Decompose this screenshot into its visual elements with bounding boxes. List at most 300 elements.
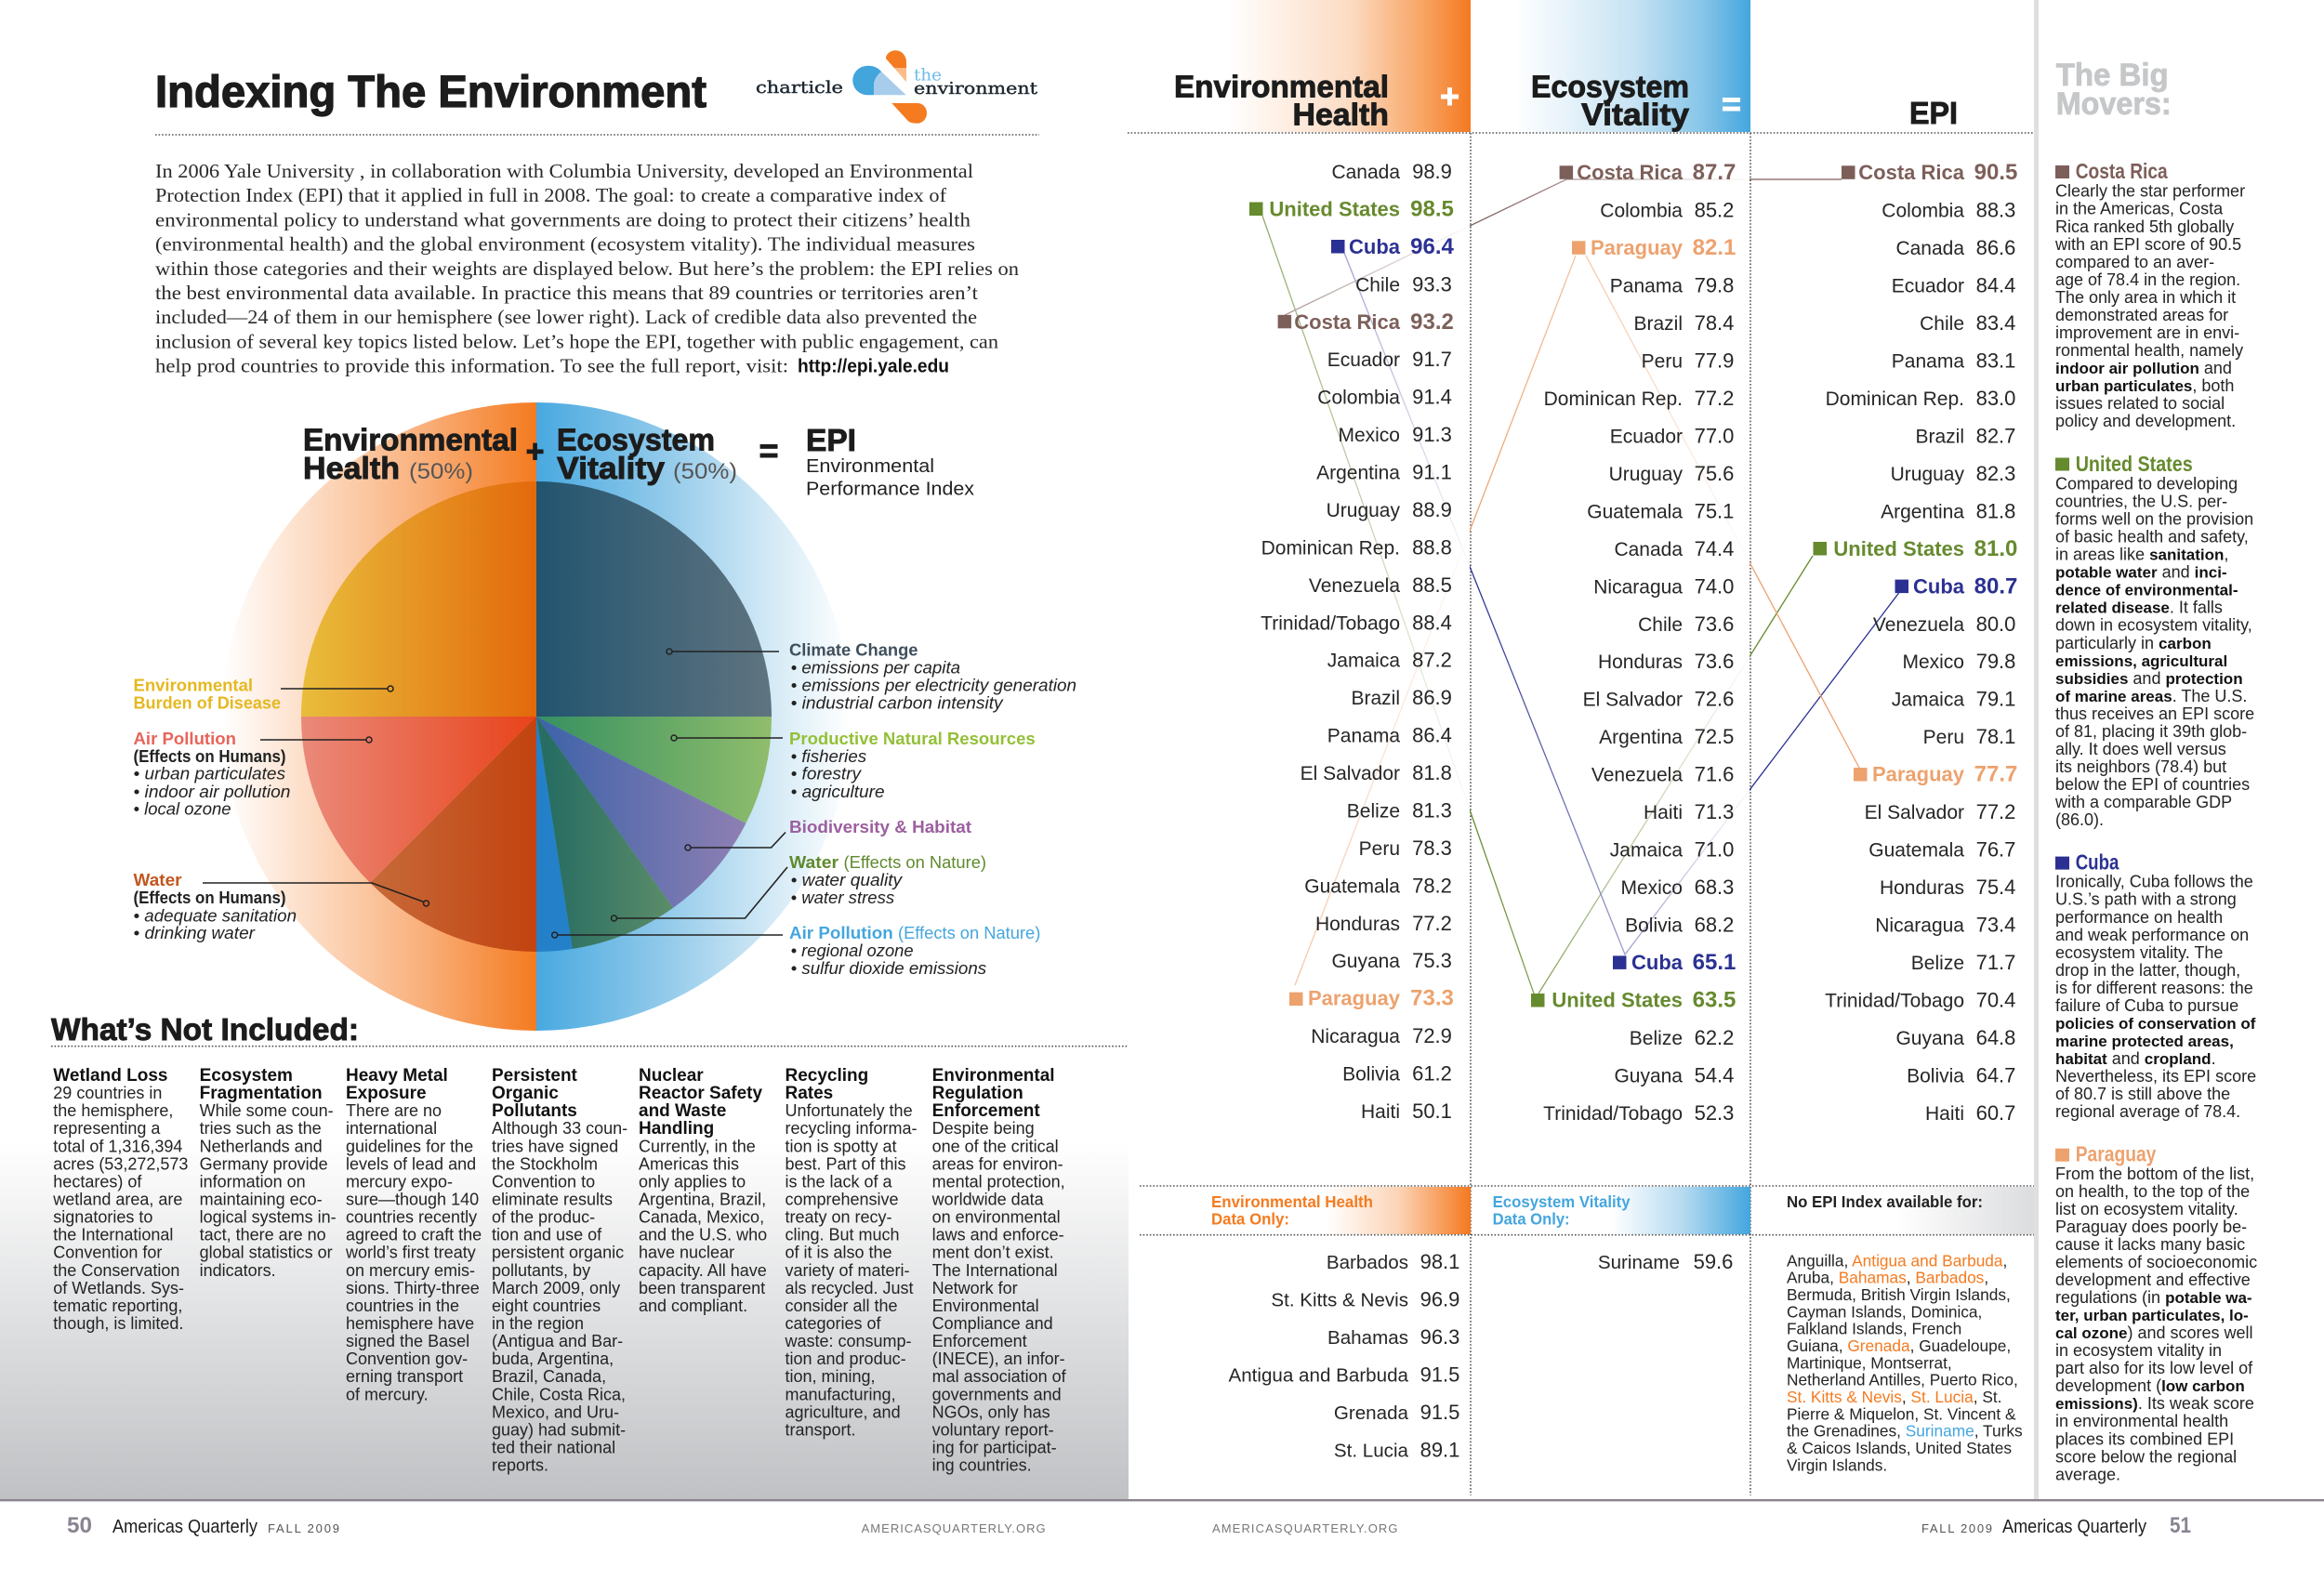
body: policies of conservation of <box>2055 1015 2256 1033</box>
column heading: ecosystem vitality <box>1531 69 1690 132</box>
not included: heavy metal exposure: of mercury. <box>346 1385 429 1403</box>
ranking column: ecosystem vitality names: El Salvador <box>1583 690 1683 711</box>
label: air pollution effects on nature <box>789 924 1040 978</box>
pie heading: EPI: Performance Index <box>806 480 974 500</box>
ranking column: EPI scores: 80.7 <box>1974 573 2017 599</box>
ranking column: environmental health scores: 93.3 <box>1412 272 1452 296</box>
heading: Costa Rica <box>2076 159 2168 183</box>
connector: Costa Rica <box>1285 179 1842 315</box>
not included: heavy metal exposure: sure—though 140 <box>346 1190 479 1208</box>
no EPI country list: Aruba, Bahamas, Barbados, <box>1787 1269 1988 1287</box>
environmental health only list: 91.5 <box>1420 1363 1459 1387</box>
not included: recycling rates: tion is spotty at <box>785 1137 897 1155</box>
ranking column: environmental health names: Ecuador <box>1327 349 1400 371</box>
ranking column: ecosystem vitality scores: 87.7 <box>1693 160 1736 185</box>
website: AMERICASQUARTERLY.ORG <box>862 1521 1046 1535</box>
environmental health only list <box>1228 1250 1459 1462</box>
body: in the Americas, Costa <box>2055 200 2224 218</box>
footer rule <box>0 1499 2324 1501</box>
not included: recycling rates: manufacturing, <box>785 1385 896 1403</box>
body: in environmental health <box>2055 1412 2228 1430</box>
column heading: environmental health: Health <box>1292 98 1389 132</box>
not included: heavy metal exposure: Convention gov- <box>346 1349 468 1368</box>
ranking column: EPI scores: 80.0 <box>1976 612 2015 636</box>
label: air pollution effects on nature: Air Pollution <box>789 924 893 942</box>
environmental health only list: Bahamas <box>1327 1327 1408 1349</box>
ranking column: environmental health names: Dominican Rep. <box>1261 537 1400 559</box>
not included: ecosystem fragmentation: Ecosystem <box>200 1066 293 1086</box>
body: Compared to developing <box>2055 474 2238 493</box>
ranking column: EPI scores: 82.7 <box>1976 424 2015 447</box>
column heading: EPI: EPI <box>1909 96 1958 130</box>
ranking column: environmental health names: Paraguay <box>1308 987 1401 1010</box>
not included: heavy metal exposure: signed the Basel <box>346 1332 469 1350</box>
not included: environmental regulation enforcement: Despite being <box>932 1119 1035 1138</box>
not included: recycling rates: Recycling <box>785 1066 868 1086</box>
not included: recycling rates: variety of materi- <box>785 1261 910 1280</box>
ranking column: ecosystem vitality scores: 77.0 <box>1695 424 1734 447</box>
label: water effects on humans: (Effects on Humans) <box>134 889 286 907</box>
ranking column: environmental health names: Canada <box>1331 162 1400 183</box>
ranking column: ecosystem vitality names: Panama <box>1610 275 1683 296</box>
heading: Cuba <box>2076 849 2119 874</box>
not included: recycling rates: agriculture, and <box>785 1402 901 1421</box>
body: down in ecosystem vitality, <box>2055 616 2252 635</box>
intro paragraph: the best environmental data available. In practice this means that 89 countries or territories aren’t <box>155 282 978 304</box>
environmental health only list: 91.5 <box>1420 1401 1459 1424</box>
ranking column: EPI scores: 77.7 <box>1974 762 2017 787</box>
ranking column: environmental health scores: 78.2 <box>1412 874 1452 897</box>
ranking column: environmental health scores: 81.3 <box>1412 799 1452 822</box>
ranking column: EPI names: Guyana <box>1895 1028 1964 1049</box>
ranking column: EPI scores: 70.4 <box>1976 989 2015 1012</box>
body: in areas like sanitation, <box>2055 546 2228 564</box>
pie heading: environmental health: (50%) <box>409 459 473 484</box>
not included: heavy metal exposure: sions. Thirty-three <box>346 1279 480 1297</box>
not included: ecosystem fragmentation: logical systems in- <box>200 1208 337 1227</box>
ranking column: environmental health scores: 88.5 <box>1412 573 1452 597</box>
ranking column: ecosystem vitality scores: 71.0 <box>1695 838 1734 862</box>
body: Rica ranked 5th globally <box>2055 217 2234 236</box>
label: water effects on nature: Water <box>789 853 838 872</box>
not included: environmental regulation enforcement: governments and <box>932 1385 1062 1403</box>
body: indoor air pollution and <box>2055 359 2232 377</box>
ranking column: EPI names: United States <box>1833 537 1964 560</box>
ranking column: ecosystem vitality names: Uruguay <box>1609 464 1683 485</box>
not included: wetland loss: the hemisphere, <box>53 1101 173 1120</box>
not included: persistent organic pollutants: (Antigua and Bar- <box>492 1332 623 1350</box>
ranking column: ecosystem vitality names: Dominican Rep. <box>1544 388 1683 410</box>
environmental health only list: 89.1 <box>1420 1439 1459 1462</box>
lower band: ecosystem vitality data only <box>1493 1187 1750 1234</box>
label: water effects on humans: • drinking water <box>134 924 256 942</box>
not included: wetland loss: Wetland Loss <box>53 1066 167 1086</box>
ranking column: ecosystem vitality scores: 72.5 <box>1695 725 1734 748</box>
ranking column: ecosystem vitality scores: 74.0 <box>1695 574 1734 598</box>
ranking column: ecosystem vitality names: Bolivia <box>1625 915 1683 937</box>
ranking column: environmental health names: Mexico <box>1338 425 1400 446</box>
ecosystem vitality only list: 59.6 <box>1694 1250 1733 1273</box>
body: potable water and inci- <box>2055 563 2227 582</box>
page number 50: 50 <box>67 1513 92 1538</box>
ranking column: ecosystem vitality names: Belize <box>1630 1028 1683 1049</box>
ranking column: EPI scores: 82.3 <box>1976 462 2015 485</box>
ranking column: ecosystem vitality scores: 73.6 <box>1695 650 1734 673</box>
not included: recycling rates: waste: consump- <box>785 1332 912 1350</box>
ranking column: environmental health names: Guyana <box>1331 951 1400 972</box>
ranking column: EPI scores: 83.4 <box>1976 311 2015 335</box>
body: score below the regional <box>2055 1447 2237 1466</box>
environmental health only list: Grenada <box>1334 1402 1409 1424</box>
ranking column: ecosystem vitality names: Brazil <box>1633 313 1683 335</box>
ranking column: environmental health names: Venezuela <box>1309 575 1400 597</box>
intro paragraph: help prod countries to provide this information. To see the full report, visit: <box>155 355 788 377</box>
label: air pollution effects on humans: • local ozone <box>134 800 231 819</box>
ranking column: EPI names: El Salvador <box>1865 802 1964 823</box>
body: on health, to the top of the <box>2055 1182 2250 1201</box>
not included: recycling rates: Unfortunately the <box>785 1101 913 1120</box>
ranking column: EPI scores: 60.7 <box>1976 1101 2015 1125</box>
ecosystem vitality only list <box>1598 1250 1733 1273</box>
ranking column: ecosystem vitality names: Ecuador <box>1610 426 1683 447</box>
not included: wetland loss: hectares) of <box>53 1172 142 1191</box>
issue date: FALL 2009 <box>1921 1521 1992 1535</box>
body: its neighbors (78.4) but <box>2055 757 2226 776</box>
body: Clearly the star performer <box>2055 182 2245 201</box>
body: particularly in carbon <box>2055 634 2212 652</box>
label: air pollution effects on nature: • sulfur dioxide emissions <box>791 959 986 978</box>
body: urban particulates, both <box>2055 376 2234 395</box>
ranking column: EPI names: Brazil <box>1915 426 1964 447</box>
logo icon <box>852 50 927 124</box>
label: water effects on nature: • water quality <box>791 871 903 889</box>
ranking column: ecosystem vitality names: Argentina <box>1599 727 1683 748</box>
ranking column: ecosystem vitality scores: 68.3 <box>1695 875 1734 899</box>
not included: nuclear reactor safety: and compliant. <box>639 1297 747 1315</box>
body: countries, the U.S. per- <box>2055 493 2227 511</box>
ranking column: EPI names: Mexico <box>1902 652 1964 673</box>
body: emissions, agricultural <box>2055 652 2227 670</box>
markers: environmental health column <box>1249 203 1344 1006</box>
ranking column: EPI names: Panama <box>1892 350 1964 372</box>
ranking column: ecosystem vitality names: Costa Rica <box>1577 161 1684 184</box>
ranking column: EPI names: Venezuela <box>1873 614 1964 636</box>
publication name: Americas Quarterly <box>2002 1517 2146 1537</box>
body: improvement are in envi- <box>2055 323 2239 342</box>
ranking column: environmental health scores: 93.2 <box>1410 309 1454 335</box>
label: air pollution effects on nature: (Effects on Nature) <box>898 924 1040 942</box>
logo: charticle the environment <box>756 50 1038 124</box>
body: regional average of 78.4. <box>2055 1102 2240 1121</box>
ranking column: ecosystem vitality names: Canada <box>1614 539 1683 560</box>
ranking column: EPI names: Costa Rica <box>1858 161 1965 184</box>
ranking column: environmental health scores: 96.4 <box>1410 234 1455 259</box>
not included: environmental regulation enforcement: Enforcement <box>932 1101 1040 1121</box>
slice: biodiversity <box>536 717 746 908</box>
body: age of 78.4 in the region. <box>2055 270 2240 289</box>
ranking column: ecosystem vitality names: Nicaragua <box>1593 576 1683 598</box>
body: in ecosystem vitality in <box>2055 1341 2222 1360</box>
not included: ecosystem fragmentation: tact, there are no <box>200 1226 326 1244</box>
body: policy and development. <box>2055 412 2236 430</box>
label: productive natural resources: Productive Natural Resources <box>789 730 1036 748</box>
website: AMERICASQUARTERLY.ORG <box>1212 1521 1398 1535</box>
ranking column: EPI scores: 79.8 <box>1976 650 2015 673</box>
ranking column: environmental health scores: 75.3 <box>1412 949 1452 972</box>
issue date: FALL 2009 <box>268 1521 339 1535</box>
ranking column: environmental health names: Panama <box>1327 726 1400 747</box>
connector: Paraguay <box>1295 256 1859 985</box>
not included: nuclear reactor safety: and Waste <box>639 1101 726 1121</box>
ranking column: ecosystem vitality scores: 68.2 <box>1695 914 1734 937</box>
body: below the EPI of countries <box>2055 775 2250 794</box>
ranking column: environmental health scores: 78.3 <box>1412 836 1452 860</box>
label: biodiversity and habitat: Biodiversity & Habitat <box>789 818 971 836</box>
not included: ecosystem fragmentation: information on <box>200 1172 306 1191</box>
marker <box>2055 457 2069 470</box>
ranking column: environmental health scores: 50.1 <box>1412 1099 1452 1123</box>
ranking column: environmental health scores: 91.3 <box>1412 423 1452 446</box>
ranking column: ecosystem vitality scores: 79.8 <box>1695 273 1734 296</box>
ranking column: ecosystem vitality names: Mexico <box>1620 877 1683 899</box>
not included: persistent organic pollutants: eight countries <box>492 1297 601 1315</box>
not included: nuclear reactor safety: Argentina, Brazil, <box>639 1190 766 1208</box>
ranking column: ecosystem vitality names: United States <box>1552 989 1683 1012</box>
heading: United States <box>2076 452 2193 476</box>
not included: heavy metal exposure: Exposure <box>346 1084 427 1103</box>
not included: wetland loss: signatories to <box>53 1208 152 1227</box>
not included: environmental regulation enforcement: one of the critical <box>932 1137 1059 1155</box>
body: Nevertheless, its EPI score <box>2055 1067 2256 1086</box>
markers: ecosystem vitality column <box>1531 165 1627 1007</box>
ranking column: ecosystem vitality scores: 72.6 <box>1695 688 1734 711</box>
ranking column: ecosystem vitality scores: 62.2 <box>1695 1026 1734 1049</box>
environmental health only list: 96.9 <box>1420 1288 1459 1311</box>
ranking column: environmental health scores: 98.9 <box>1412 160 1452 183</box>
ranking column: environmental health scores: 88.4 <box>1412 611 1452 634</box>
marker <box>2055 857 2069 870</box>
connector: Cuba <box>1344 253 1899 954</box>
ranking column: environmental health scores: 81.8 <box>1412 761 1452 784</box>
not included: ecosystem fragmentation: maintaining eco- <box>200 1190 323 1208</box>
not included: wetland loss: total of 1,316,394 <box>53 1137 182 1155</box>
ecosystem vitality only list: Suriname <box>1598 1252 1680 1273</box>
column heading: environmental health <box>1174 69 1389 132</box>
body: ally. It does well versus <box>2055 740 2226 758</box>
pie chart <box>301 481 772 952</box>
title: Indexing The Environment <box>155 68 706 117</box>
ranking column: ecosystem vitality names: Paraguay <box>1591 236 1684 259</box>
ranking column: EPI names: Bolivia <box>1907 1065 1964 1087</box>
logo word: environment: environment <box>914 79 1038 99</box>
not included: environmental regulation enforcement: Network for <box>932 1279 1018 1297</box>
logo word: the: the <box>914 66 942 86</box>
environmental health only list: St. Lucia <box>1334 1441 1409 1462</box>
ranking column: environmental health names: United States <box>1269 197 1400 220</box>
column heading: environmental health: Environmental <box>1174 69 1389 104</box>
not included: wetland loss: the Conservation <box>53 1261 179 1280</box>
ranking column: environmental health names: Guatemala <box>1304 875 1400 897</box>
big mover connector lines <box>1262 179 1899 994</box>
pie heading: ecosystem vitality: (50%) <box>673 459 737 484</box>
no EPI country list: Martinique, Montserrat, <box>1787 1353 1952 1372</box>
not included: recycling rates: is the lack of a <box>785 1172 893 1191</box>
ranking column: ecosystem vitality scores: 71.6 <box>1695 763 1734 786</box>
ranking column: environmental health names: Jamaica <box>1327 651 1400 672</box>
not included: heavy metal exposure: on mercury emis- <box>346 1261 475 1280</box>
intro paragraph: Protection Index (EPI) that it applied in full in 2008. The goal: to create a comparative index of <box>155 184 946 206</box>
mover: Costa Rica <box>2054 159 2250 430</box>
not included: persistent organic pollutants: Convention to <box>492 1172 595 1191</box>
ranking column: EPI scores: 76.7 <box>1976 838 2015 862</box>
not included: recycling rates: recycling informa- <box>785 1119 918 1138</box>
mover: United States <box>2054 452 2259 829</box>
not included: environmental regulation enforcement: ing countries. <box>932 1456 1032 1475</box>
not included: wetland loss: Convention for <box>53 1244 162 1262</box>
not included: environmental regulation enforcement: Environmental <box>932 1066 1055 1086</box>
body: dence of environmental- <box>2055 582 2238 599</box>
sidebar title: The Big Movers: Movers: <box>2056 86 2172 122</box>
ranking column: ecosystem vitality scores: 73.6 <box>1695 612 1734 636</box>
no EPI country list: & Caicos Islands, United States <box>1787 1439 2012 1457</box>
no EPI country list: Netherland Antilles, Puerto Rico, <box>1787 1371 2018 1389</box>
not included: persistent organic pollutants: Persistent <box>492 1066 578 1086</box>
ranking column: EPI scores: 73.4 <box>1976 914 2015 937</box>
not included: environmental regulation enforcement: NGOs, only has <box>932 1402 1050 1421</box>
not included: environmental regulation enforcement: ment don’t exist. <box>932 1244 1054 1262</box>
label: water effects on nature: (Effects on Nature) <box>844 853 986 872</box>
ranking column: EPI scores: 83.1 <box>1976 349 2015 372</box>
intro paragraph <box>155 160 1020 377</box>
body: (86.0). <box>2055 810 2104 829</box>
not included: heavy metal exposure: levels of lead and <box>346 1154 476 1173</box>
not included: wetland loss: 29 countries in <box>53 1084 162 1102</box>
column heading: ecosystem vitality: Ecosystem <box>1531 69 1689 104</box>
not included: nuclear reactor safety: have nuclear <box>639 1244 734 1262</box>
slice: productive natural resources <box>536 717 772 823</box>
not included: recycling rates: tion and produc- <box>785 1349 906 1368</box>
ranking column: EPI names: Trinidad/Tobago <box>1825 991 1964 1012</box>
not included: nuclear reactor safety: Currently, in the <box>639 1137 756 1155</box>
body: cause it lacks many basic <box>2055 1235 2245 1254</box>
pie heading: environmental health: Health <box>303 451 400 485</box>
not included: persistent organic pollutants: Pollutants <box>492 1101 577 1121</box>
ranking column: EPI scores: 88.3 <box>1976 199 2015 221</box>
not included: heavy metal exposure: mercury expo- <box>346 1172 453 1191</box>
not included: environmental regulation enforcement: (INECE), an infor- <box>932 1349 1065 1368</box>
not included: recycling rates: comprehensive <box>785 1190 899 1208</box>
no EPI country list: Cayman Islands, Dominica, <box>1787 1302 1982 1321</box>
label: water effects on nature <box>789 853 986 907</box>
pie heading: environmental health <box>303 423 518 485</box>
lower band: ecosystem vitality data only: Data Only: <box>1493 1210 1570 1229</box>
heading: Paraguay <box>2076 1141 2157 1165</box>
ranking column: ecosystem vitality scores: 71.3 <box>1695 800 1734 823</box>
intro paragraph: (environmental health) and the global environment (ecosystem vitality). The individual measures <box>155 232 975 255</box>
ranking column: EPI names: Dominican Rep. <box>1826 388 1964 410</box>
slice: water nature <box>536 717 673 949</box>
body: Ironically, Cuba follows the <box>2055 873 2253 891</box>
environmental health only list: St. Kitts & Nevis <box>1271 1290 1408 1311</box>
not included: environmental regulation enforcement: worldwide data <box>931 1190 1045 1208</box>
label: climate change: • emissions per electricity generation <box>791 677 1076 695</box>
not included: persistent organic pollutants: the Stockholm <box>492 1154 598 1173</box>
not included: environmental regulation enforcement: mental protection, <box>932 1172 1065 1191</box>
ranking column: environmental health scores: 87.2 <box>1412 649 1452 672</box>
ranking column: environmental health names: Brazil <box>1351 688 1400 709</box>
body: Paraguay does poorly be- <box>2055 1218 2247 1236</box>
ranking column: environmental health scores: 86.4 <box>1412 724 1452 747</box>
not included: recycling rates: transport. <box>785 1420 856 1439</box>
not included: environmental regulation enforcement: on environmental <box>932 1208 1061 1227</box>
ranking column: ecosystem vitality scores: 82.1 <box>1693 235 1736 260</box>
ranking column: environmental health scores: 91.7 <box>1412 348 1452 371</box>
ranking column: EPI scores: 77.2 <box>1976 800 2015 823</box>
body: of basic health and safety, <box>2055 528 2249 546</box>
body: of marine areas. The U.S. <box>2055 687 2247 705</box>
not included: environmental regulation enforcement: voluntary report- <box>932 1420 1054 1439</box>
slice: air pollution humans <box>301 717 536 883</box>
not included: persistent organic pollutants: tries have signed <box>492 1137 618 1155</box>
not included: ecosystem fragmentation: While some coun- <box>200 1101 334 1120</box>
ranking column: ecosystem vitality scores: 54.4 <box>1695 1063 1734 1087</box>
body: subsidies and protection <box>2055 669 2243 688</box>
environmental health only list: 98.1 <box>1420 1250 1459 1273</box>
ranking column: environmental health names: El Salvador <box>1301 763 1400 784</box>
not included: nuclear reactor safety: and the U.S. who <box>639 1226 767 1244</box>
ranking column: EPI scores: 75.4 <box>1976 875 2015 899</box>
body: forms well on the provision <box>2055 510 2253 529</box>
not included: heavy metal exposure: erning transport <box>346 1367 463 1386</box>
footer right <box>1212 1513 2191 1538</box>
environmental health only list: Barbados <box>1327 1252 1408 1273</box>
not included: persistent organic pollutants: of the produc- <box>492 1208 595 1227</box>
ranking column: environmental health scores: 91.4 <box>1412 386 1452 409</box>
pie heading: ecosystem vitality <box>557 423 737 485</box>
header band: ecosystem vitality gradient <box>1515 0 1750 132</box>
pie heading: ecosystem vitality: Vitality <box>557 451 666 485</box>
body: ronmental health, namely <box>2055 341 2243 360</box>
ranking column: ecosystem vitality names: Venezuela <box>1591 765 1683 786</box>
header band: environmental health gradient <box>1227 0 1471 132</box>
body: U.S.’s path with a strong <box>2055 890 2237 909</box>
body: of 80.7 is still above the <box>2055 1085 2230 1103</box>
label: productive natural resources: • agriculture <box>791 783 885 801</box>
not included: wetland loss: the International <box>53 1226 173 1244</box>
label: air pollution effects on humans <box>134 730 290 819</box>
ranking column: environmental health names: Belize <box>1347 801 1400 822</box>
ranking column: ecosystem vitality scores: 74.4 <box>1695 537 1734 560</box>
not included: recycling rates: als recycled. Just <box>785 1279 914 1297</box>
ranking column: ecosystem vitality scores: 52.3 <box>1695 1101 1734 1125</box>
not included: environmental regulation enforcement: Environmental <box>932 1297 1039 1315</box>
intro paragraph: http://epi.yale.edu <box>798 357 949 377</box>
connector: United States <box>1262 216 1813 994</box>
no EPI country list: Anguilla, Antigua and Barbuda, <box>1787 1251 2007 1270</box>
ranking column: EPI scores: 79.1 <box>1976 688 2015 711</box>
ranking column: EPI names: Guatemala <box>1868 840 1964 862</box>
ranking column: EPI names: Nicaragua <box>1875 915 1964 937</box>
ranking column: environmental health names: Colombia <box>1317 388 1400 409</box>
body: with an EPI score of 90.5 <box>2054 235 2241 254</box>
label: productive natural resources: • forestry <box>791 765 862 783</box>
slice: water humans <box>370 717 536 952</box>
slice: climate change <box>536 481 772 717</box>
pie heading: EPI <box>806 423 974 500</box>
ranking column: EPI scores: 86.6 <box>1976 236 2015 259</box>
label: water effects on humans: • adequate sanitation <box>134 906 297 925</box>
not included: ecosystem fragmentation: global statistics or <box>200 1244 333 1262</box>
